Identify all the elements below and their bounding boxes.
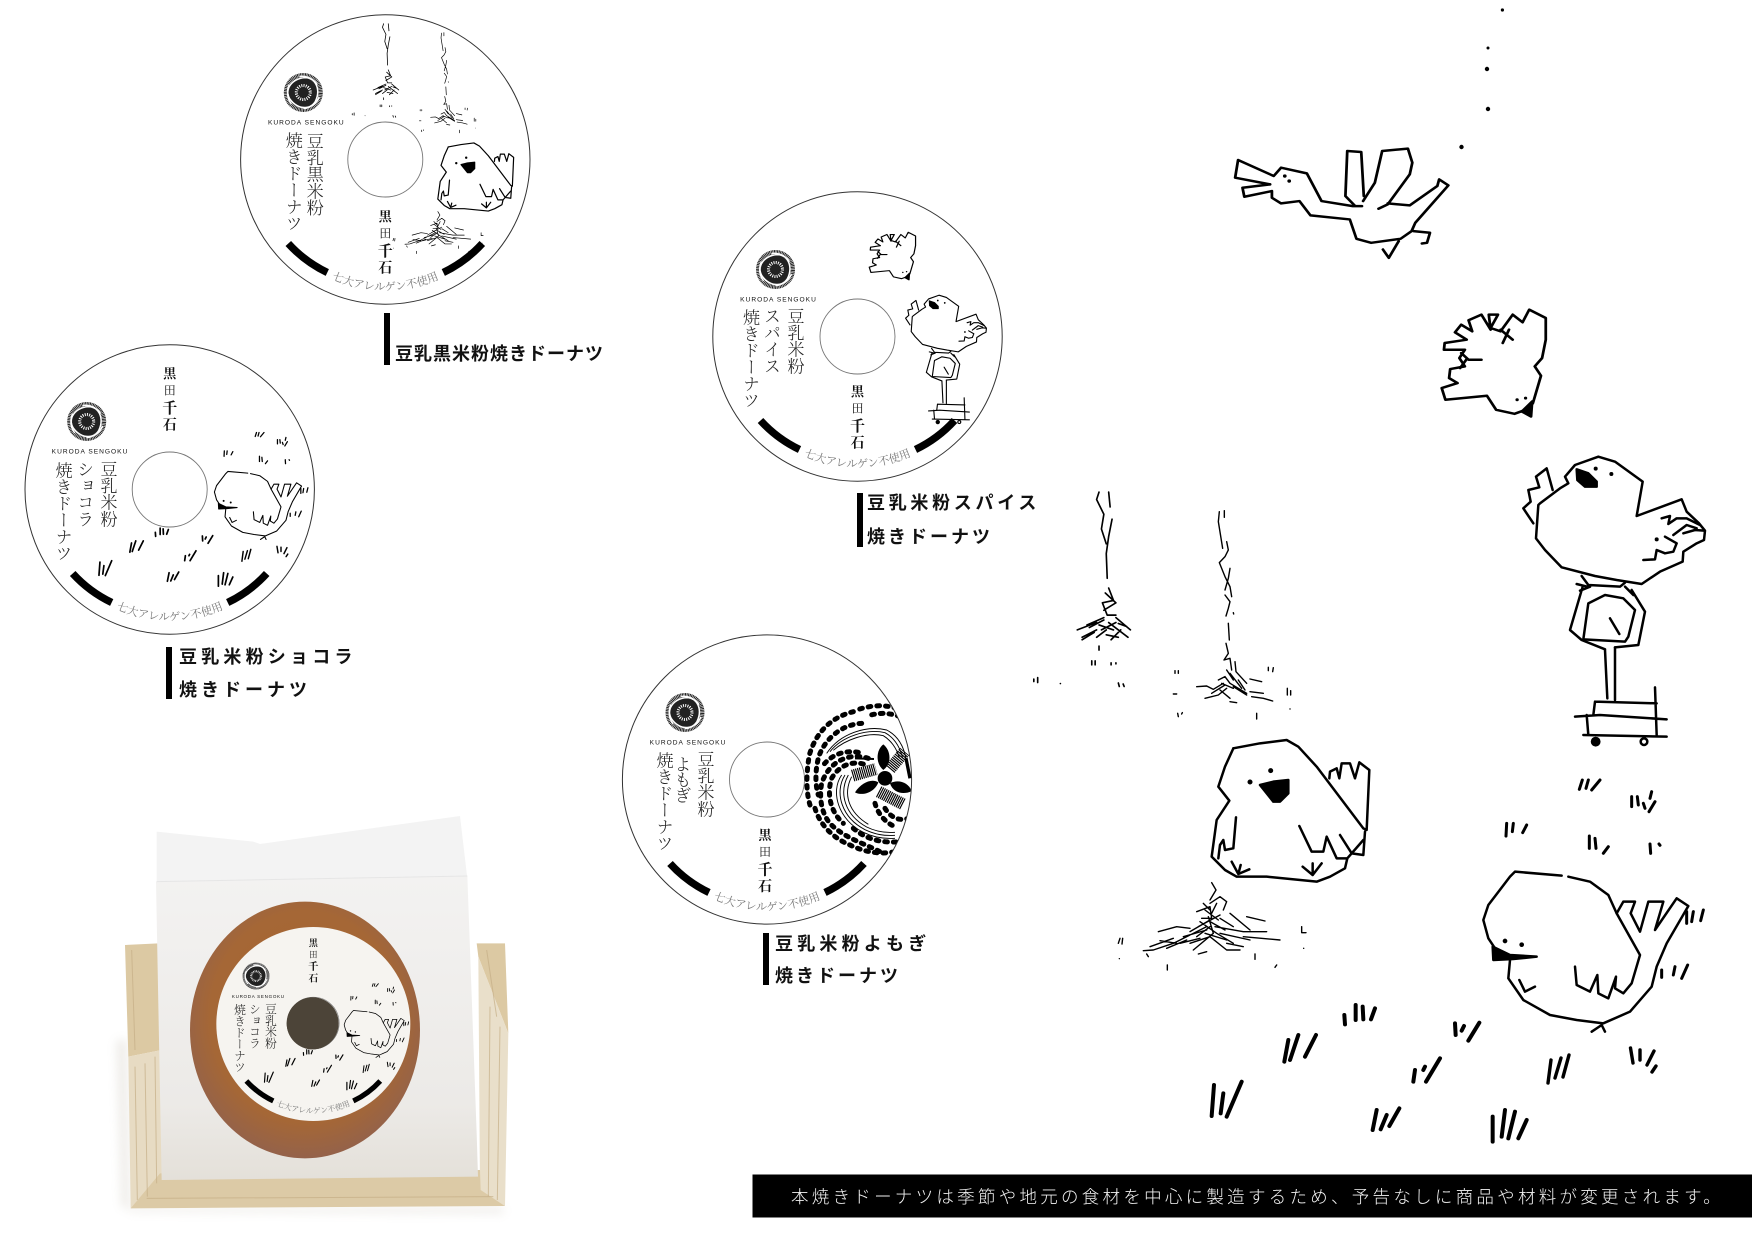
brand signature bbox=[757, 828, 773, 895]
disc centre hole bbox=[348, 122, 423, 197]
illustration: whale-like bird among grass bbox=[1212, 780, 1703, 1142]
brand name: KURODA SENGOKU bbox=[52, 448, 128, 456]
panel: disc label black rice flour bbox=[240, 14, 530, 305]
sitting bird bbox=[1212, 740, 1369, 882]
panel: disc label spice bbox=[712, 191, 1003, 482]
short smoke bbox=[1034, 492, 1130, 686]
brand signature bbox=[850, 384, 865, 452]
product name: spice: 豆乳米粉スパイス bbox=[867, 493, 1040, 513]
brand name: KURODA SENGOKU bbox=[650, 740, 726, 746]
black arc bars bbox=[670, 864, 864, 892]
brand name: KURODA SENGOKU bbox=[268, 120, 345, 126]
black arc bars bbox=[760, 420, 954, 450]
wooden stand bbox=[125, 943, 508, 1208]
illustration: bird in grass bbox=[99, 432, 308, 586]
donut bbox=[190, 902, 420, 1158]
paper label on donut bbox=[216, 927, 410, 1121]
vertical product name: 豆乳米粉 bbox=[98, 460, 117, 528]
brand crest logo bbox=[664, 692, 704, 733]
product name: chocolat: 焼きドーナツ bbox=[179, 680, 311, 700]
vertical product name: ショコラ bbox=[74, 460, 93, 527]
brand crest logo bbox=[754, 249, 795, 290]
disc outline bbox=[622, 635, 912, 924]
allergen text on arc: 七大アレルゲン不使用 bbox=[806, 448, 910, 468]
soft shadow bbox=[117, 1040, 503, 1213]
vertical product name: 豆乳米粉 bbox=[694, 750, 714, 818]
photo: packaged donut on wooden stand bbox=[117, 816, 508, 1213]
vertical product name: 焼きドーナツ bbox=[740, 308, 760, 408]
illustration: smoke, sitting bird and brush pile bbox=[1034, 492, 1369, 970]
disc centre hole bbox=[820, 299, 895, 374]
disc artwork bbox=[52, 366, 308, 621]
grass tufts lower bbox=[1212, 1005, 1527, 1142]
illustration: small feather bird bbox=[869, 232, 916, 280]
allergen text on arc: 七大アレルゲン不使用 bbox=[715, 891, 820, 911]
disc outline bbox=[25, 345, 314, 634]
brush pile bbox=[1118, 883, 1306, 970]
vertical product name: スパイス bbox=[761, 308, 780, 374]
label artwork on photographed donut bbox=[232, 938, 409, 1115]
illustration: bird on scale bbox=[906, 295, 986, 424]
notice bar bbox=[752, 1174, 1752, 1218]
product name: chocolat: 豆乳米粉ショコラ bbox=[179, 647, 357, 667]
bird bbox=[1483, 872, 1688, 1032]
product name: spice bbox=[857, 493, 1040, 547]
clear bag bbox=[156, 816, 478, 1180]
panel: disc label yomogi bbox=[622, 634, 912, 925]
hole of photographed donut bbox=[287, 997, 339, 1049]
disc centre hole bbox=[730, 742, 804, 817]
vertical product name: 焼きドーナツ bbox=[654, 751, 673, 851]
rice crest emblem bbox=[807, 706, 912, 853]
allergen text on arc: 七大アレルゲン不使用 bbox=[334, 271, 438, 291]
brand signature bbox=[162, 366, 177, 434]
vertical product name bbox=[283, 131, 323, 231]
vertical product name bbox=[52, 460, 117, 561]
illustration: feather bird bbox=[1442, 310, 1546, 417]
vertical product name: よもぎ bbox=[672, 756, 690, 802]
tall smoke bbox=[1173, 511, 1291, 719]
vertical product name: 豆乳黒米粉 bbox=[304, 132, 323, 217]
disc centre hole bbox=[132, 452, 207, 527]
grass tufts upper bbox=[1506, 780, 1703, 978]
brand name: KURODA SENGOKU bbox=[740, 296, 817, 304]
panel: disc label chocolat bbox=[24, 344, 315, 635]
vertical product name bbox=[740, 307, 804, 408]
illustration: bird standing on scale bbox=[1523, 457, 1705, 745]
illustration: flying bird bbox=[1235, 149, 1448, 258]
black arc bars bbox=[288, 244, 482, 272]
allergen text on arc: 七大アレルゲン不使用 bbox=[118, 601, 222, 621]
product name: yomogi: 焼きドーナツ bbox=[775, 966, 901, 986]
brand crest logo bbox=[282, 72, 323, 113]
vertical product name bbox=[654, 750, 714, 851]
disc outline bbox=[241, 15, 530, 304]
black arc bars bbox=[73, 574, 267, 602]
grass tufts right bbox=[1548, 1048, 1656, 1083]
product name: black rice flour bbox=[384, 313, 604, 365]
illustration: smoke and sitting bird bbox=[352, 24, 514, 254]
notice bar: 本焼きドーナツは季節や地元の食材を中心に製造するため、予告なしに商品や材料が変更されます。 bbox=[791, 1187, 1724, 1207]
illustration: dots trail bbox=[1459, 8, 1504, 149]
product name: chocolat bbox=[166, 647, 357, 700]
brand signature bbox=[378, 209, 393, 276]
vertical product name: 焼きドーナツ bbox=[283, 131, 302, 231]
brand crest logo bbox=[65, 401, 106, 442]
product name: yomogi bbox=[763, 933, 930, 986]
vertical product name: 焼きドーナツ bbox=[52, 461, 72, 561]
product name: black rice flour: 豆乳黒米粉焼きドーナツ bbox=[395, 344, 604, 364]
vertical product name: 豆乳米粉 bbox=[784, 307, 804, 375]
disc outline bbox=[713, 192, 1002, 481]
product name: spice: 焼きドーナツ bbox=[867, 527, 993, 547]
product name: yomogi: 豆乳米粉よもぎ bbox=[775, 933, 930, 954]
